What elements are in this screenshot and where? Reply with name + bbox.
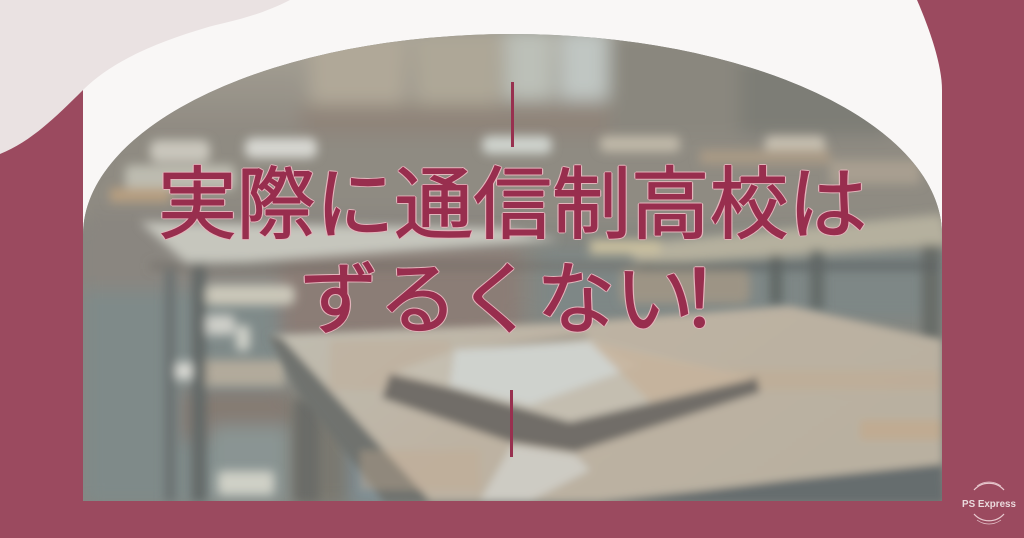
title — [158, 161, 867, 344]
middle band — [70, 135, 960, 225]
decorative blush corner shape — [0, 0, 290, 154]
title line 1: 実際に通信制高校は — [158, 161, 867, 249]
logo: PS Express: PS Express — [962, 499, 1017, 510]
main desk top — [270, 306, 942, 501]
notebook on far side of desk — [524, 332, 586, 345]
chair and desk legs — [165, 270, 175, 502]
divider line above title — [511, 82, 514, 147]
title line 2: ずるくない — [300, 256, 694, 344]
logo: PS Express — [962, 482, 1017, 524]
panel: off-white arch backdrop — [83, 0, 942, 501]
divider line below title — [510, 390, 513, 457]
photo: blurred classroom with book on desk — [70, 25, 960, 505]
background desks — [245, 138, 317, 158]
wall and windows — [134, 34, 572, 140]
title: ！ — [660, 256, 739, 344]
book — [382, 374, 760, 452]
